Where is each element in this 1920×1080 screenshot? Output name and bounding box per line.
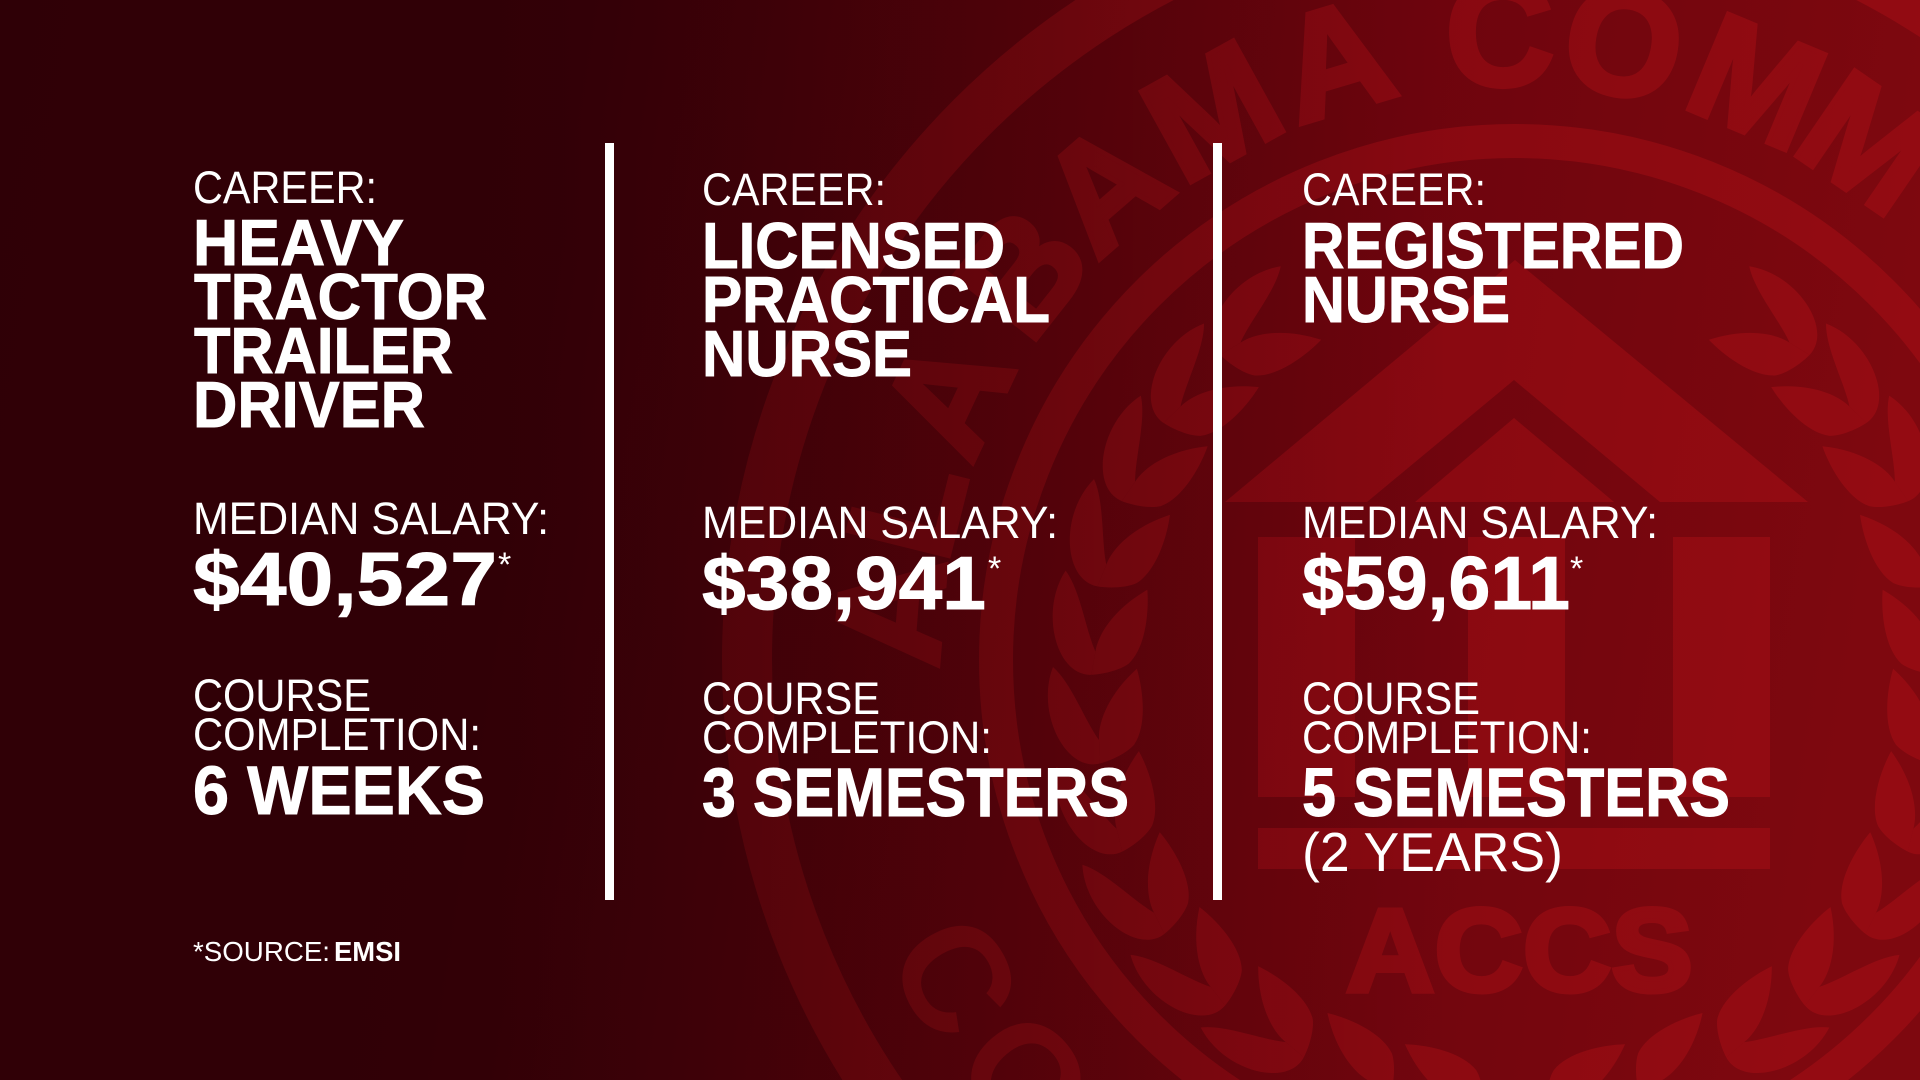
seal lettering (802, 0, 1920, 1080)
career title: LICENSED (702, 209, 1005, 282)
career label: CAREER: (1302, 164, 1486, 215)
career title (1302, 209, 1684, 336)
completion label: COURSE (1302, 673, 1480, 724)
career label: CAREER: (702, 164, 886, 215)
career label: CAREER: (193, 162, 377, 213)
career title: HEAVY (193, 206, 404, 279)
completion label (1302, 673, 1592, 763)
salary label: MEDIAN SALARY: (702, 497, 1058, 548)
seal lettering: B (923, 178, 1122, 367)
career title: TRACTOR (194, 260, 487, 333)
seal ACCS text: ACCS (1346, 885, 1693, 1017)
salary label: MEDIAN SALARY: (1302, 497, 1658, 548)
career title (702, 209, 1050, 390)
completion label: COMPLETION: (702, 712, 992, 763)
completion note: (2 YEARS) (1302, 821, 1563, 883)
salary value: $59,611 (1302, 541, 1570, 625)
completion label (193, 670, 481, 760)
career title (193, 206, 487, 441)
divider 1 (605, 143, 614, 900)
watermark seal (747, 0, 1920, 1080)
seal lettering: C (856, 888, 1055, 1065)
salary value: $38,941 (702, 541, 986, 625)
seal lettering: M (1117, 7, 1307, 215)
source note (193, 936, 401, 967)
career title: PRACTICAL (702, 263, 1050, 336)
career title: NURSE (702, 317, 912, 390)
completion label: COMPLETION: (193, 709, 481, 760)
completion label: COURSE (702, 673, 880, 724)
completion value: 6 WEEKS (193, 752, 485, 829)
career title: DRIVER (193, 368, 425, 441)
career title: TRAILER (194, 314, 453, 387)
salary value: $40,527 (193, 537, 497, 621)
seal lettering: A (848, 310, 1046, 480)
column: registered nurse (1302, 164, 1730, 883)
seal lettering: L (814, 444, 999, 573)
column: heavy tractor trailer driver (193, 162, 549, 829)
salary value: * (498, 546, 511, 584)
completion value: 5 SEMESTERS (1302, 754, 1730, 831)
inner ring (996, 141, 1920, 1080)
career title: NURSE (1302, 263, 1510, 336)
salary value: * (1570, 550, 1583, 588)
source note: EMSI (334, 936, 401, 967)
right laurel (1542, 256, 1920, 1080)
salary value: * (988, 550, 1001, 588)
career title: REGISTERED (1302, 209, 1684, 282)
seal lettering: A (802, 550, 978, 671)
source note: *SOURCE: (193, 936, 330, 967)
seal lettering: A (1008, 88, 1200, 286)
completion value: 3 SEMESTERS (702, 754, 1129, 831)
salary label: MEDIAN SALARY: (193, 493, 549, 544)
left laurel (1039, 256, 1488, 1080)
building columns and base (1258, 537, 1770, 869)
column: licensed practical nurse (702, 164, 1129, 831)
divider 2 (1213, 143, 1222, 900)
completion label: COMPLETION: (1302, 712, 1592, 763)
outer ring (747, 0, 1920, 1080)
building roof (1225, 260, 1808, 502)
completion label: COURSE (193, 670, 371, 721)
completion label (702, 673, 992, 763)
